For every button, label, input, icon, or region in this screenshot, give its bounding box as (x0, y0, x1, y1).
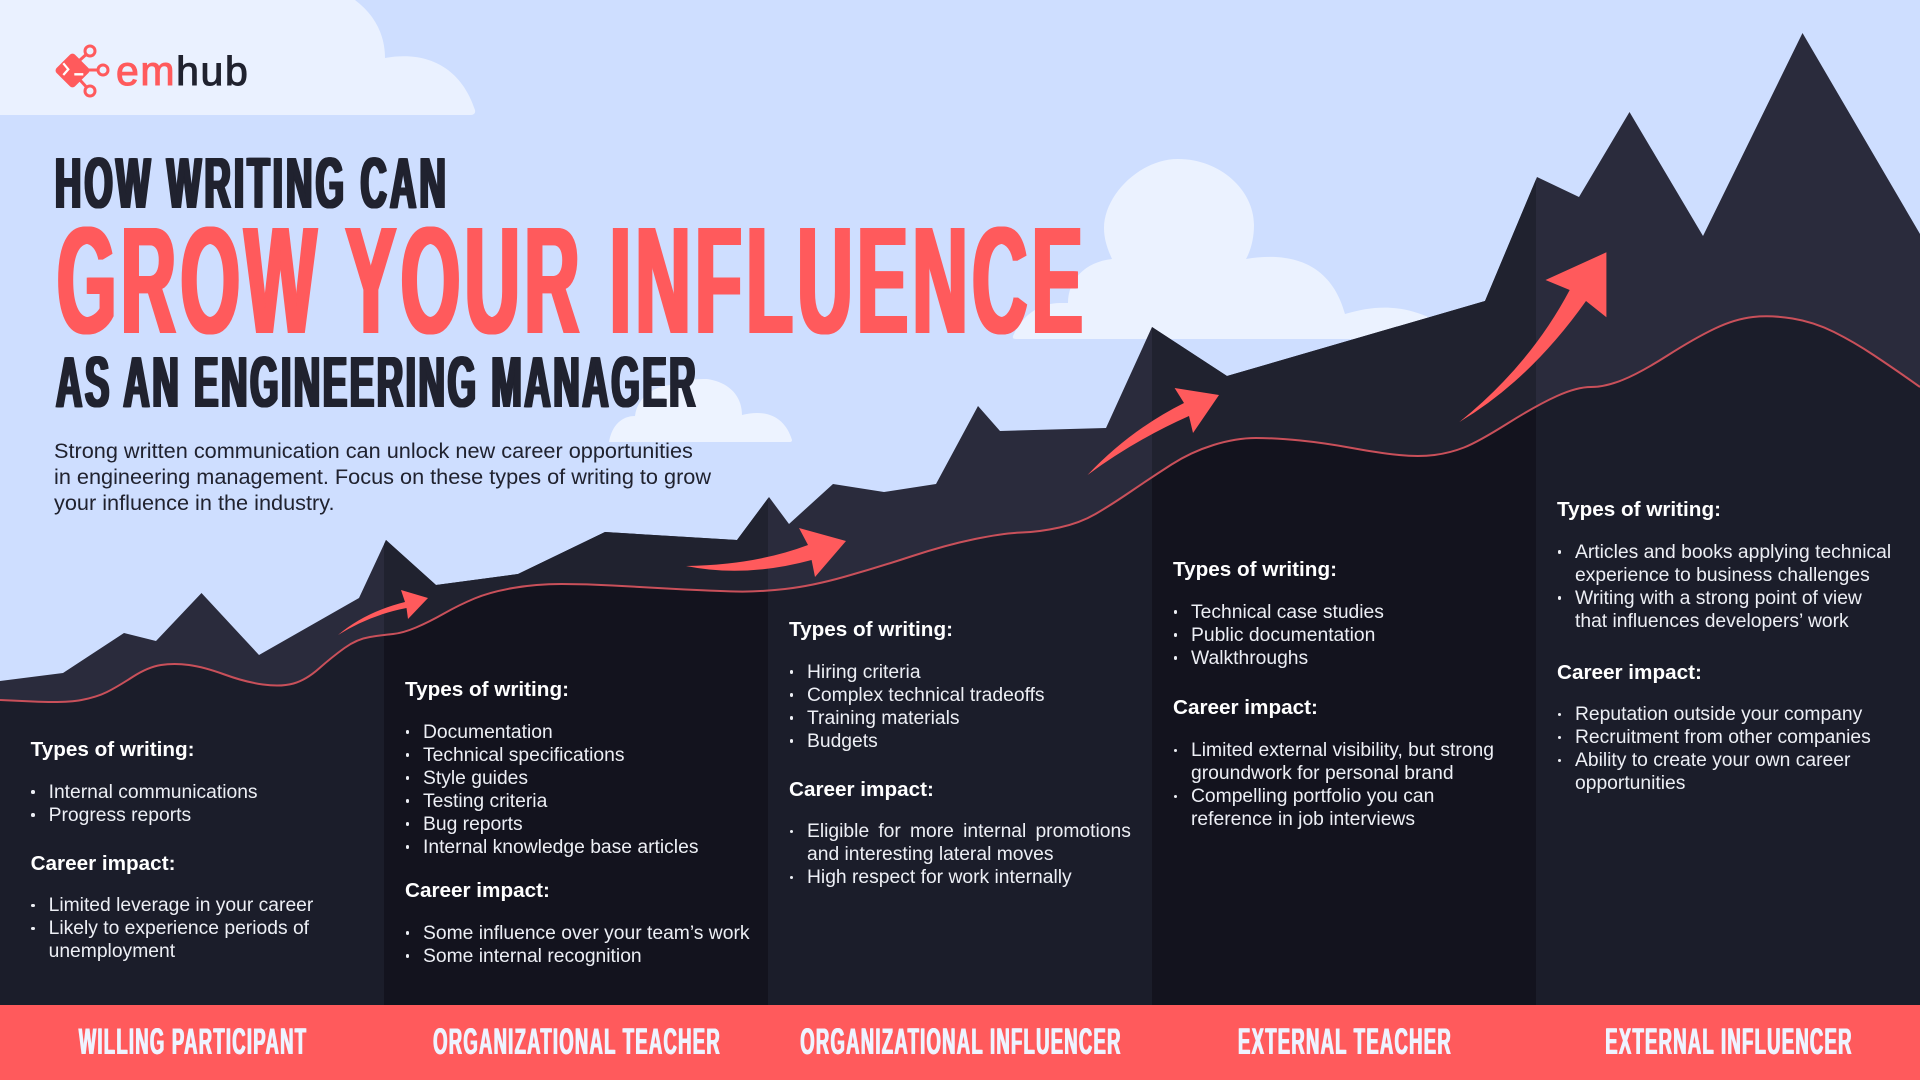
types of writing heading: Types of writing: (31, 738, 195, 761)
title (55, 142, 1087, 422)
career impact list (31, 895, 313, 962)
logo: emhub (56, 44, 249, 98)
mountain range (0, 33, 1920, 701)
types of writing heading: Types of writing: (789, 618, 953, 641)
intro paragraph: your influence in the industry. (54, 490, 334, 515)
types of writing list: Training materials (807, 708, 960, 728)
career impact list: Some internal recognition (423, 946, 642, 966)
growth curve (0, 316, 1920, 702)
types of writing list (1558, 542, 1891, 632)
career impact list: High respect for work internally (807, 867, 1072, 888)
types of writing list: Walkthroughs (1191, 648, 1308, 668)
career impact heading: Career impact: (31, 852, 175, 874)
types of writing list: Writing with a strong point of view (1575, 588, 1862, 608)
types of writing list: Technical specifications (423, 744, 624, 766)
arrow 4 (1459, 252, 1606, 422)
career impact list (406, 922, 750, 966)
types of writing list (406, 722, 698, 858)
career impact list: Limited external visibility, but strong (1191, 740, 1494, 761)
stage label 5: EXTERNAL INFLUENCER (1605, 1021, 1852, 1062)
types of writing list (31, 782, 258, 826)
types of writing list (1174, 602, 1384, 668)
intro paragraph: in engineering management. Focus on these types of writing to grow (54, 464, 711, 489)
types of writing heading: Types of writing: (1557, 498, 1721, 521)
career impact list: Limited leverage in your career (49, 895, 313, 916)
types of writing list: Budgets (807, 730, 878, 752)
types of writing list (790, 662, 1045, 752)
career impact list: Compelling portfolio you can (1191, 786, 1434, 807)
types of writing heading: Types of writing: (1173, 558, 1337, 581)
cloud: small behind title (609, 379, 792, 442)
types of writing list: experience to business challenges (1575, 564, 1870, 586)
career impact list: and interesting lateral moves (807, 844, 1054, 865)
title line 3: AS AN ENGINEERING MANAGER (56, 342, 698, 422)
career impact list (790, 821, 1131, 888)
cloud: large centre (1013, 159, 1465, 339)
panel: willing participant (30, 738, 313, 962)
dark foreground below the curve (0, 317, 1920, 1005)
intro paragraph: Strong written communication can unlock new career opportunities (54, 438, 693, 463)
logo icon (54, 46, 108, 96)
arrow 3 (1088, 388, 1219, 475)
types of writing list: Internal communications (49, 782, 258, 802)
types of writing list: Style guides (423, 768, 528, 788)
stage label 2: ORGANIZATIONAL TEACHER (433, 1021, 721, 1062)
cloud: top left behind logo (0, 0, 475, 115)
career impact list (1558, 704, 1871, 794)
career impact list: reference in job interviews (1191, 809, 1415, 830)
career impact list: unemployment (49, 941, 175, 962)
stage label 3: ORGANIZATIONAL INFLUENCER (800, 1021, 1121, 1062)
types of writing list: Technical case studies (1191, 602, 1384, 622)
stage label 1: WILLING PARTICIPANT (78, 1021, 307, 1062)
title line 2: GROW YOUR INFLUENCE (57, 196, 1087, 366)
types of writing list: Hiring criteria (807, 662, 921, 682)
arrow 2 (686, 528, 846, 577)
types of writing list: Progress reports (49, 804, 191, 826)
stage label 4: EXTERNAL TEACHER (1238, 1021, 1452, 1062)
career impact heading: Career impact: (405, 879, 550, 902)
career impact list: Some influence over your team’s work (423, 922, 750, 944)
panel: external teacher (1173, 558, 1494, 830)
footer band with stage labels (0, 1005, 1920, 1080)
types of writing list: Testing criteria (423, 790, 547, 812)
logo wordmark: emhub (116, 48, 249, 94)
career impact list (1174, 740, 1494, 830)
types of writing list: Internal knowledge base articles (423, 836, 698, 858)
career impact list: opportunities (1575, 773, 1685, 794)
career impact list: Eligible for more internal promotions (807, 821, 1131, 842)
career impact heading: Career impact: (1557, 660, 1702, 684)
types of writing heading: Types of writing: (405, 678, 569, 701)
title line 1: HOW WRITING CAN (55, 142, 449, 224)
career impact list: Likely to experience periods of (49, 918, 309, 939)
types of writing list: Bug reports (423, 814, 523, 834)
types of writing list: Public documentation (1191, 624, 1375, 646)
types of writing list: Complex technical tradeoffs (807, 684, 1045, 706)
panel: organizational teacher (405, 678, 750, 966)
types of writing list: Documentation (423, 722, 553, 742)
career impact heading: Career impact: (789, 778, 934, 800)
panel: external influencer (1557, 498, 1891, 794)
intro paragraph (54, 438, 712, 515)
career impact list: Recruitment from other companies (1575, 727, 1871, 748)
arrow 1 (338, 590, 428, 635)
types of writing list: Articles and books applying technical (1575, 542, 1891, 562)
career impact list: Ability to create your own career (1575, 750, 1850, 771)
career impact list: Reputation outside your company (1575, 704, 1862, 725)
panel: organizational influencer (789, 618, 1131, 888)
career impact list: groundwork for personal brand (1191, 763, 1454, 784)
career impact heading: Career impact: (1173, 696, 1318, 719)
types of writing list: that influences developers’ work (1575, 610, 1849, 632)
